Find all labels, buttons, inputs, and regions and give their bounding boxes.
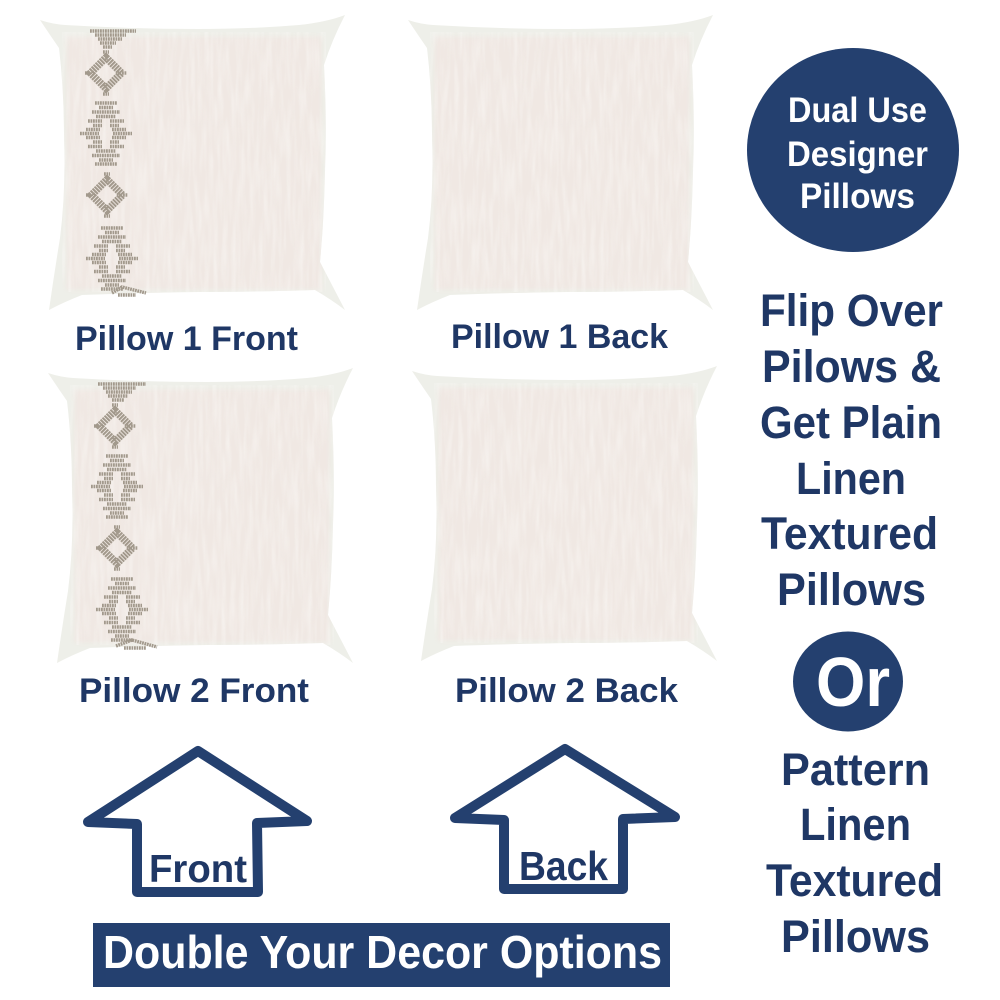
badge: Or: Or	[816, 643, 890, 721]
text block: flip over: Textured	[761, 508, 938, 559]
text block: pattern: Linen	[800, 799, 911, 850]
arrow: Back	[455, 749, 675, 889]
label: Pillow 2 Front: Pillow 2 Front	[79, 672, 309, 710]
pattern: pillow 2 front motifs	[91, 384, 157, 648]
label: Back: Back	[519, 843, 608, 889]
text block: pattern: Pillows	[781, 911, 930, 962]
banner: Double Your Decor Options: Double Your Decor Options	[103, 926, 662, 978]
text block: pattern: Pattern	[781, 744, 930, 795]
pillow 2 back	[412, 366, 717, 661]
text block: flip over: Pillows	[777, 564, 926, 615]
badge: Dual Use Designer Pillows	[747, 48, 959, 252]
badge: Dual Use Designer Pillows: Designer	[787, 135, 928, 174]
badge: Dual Use Designer Pillows: Dual Use	[788, 91, 927, 130]
text block: flip over: Linen	[796, 453, 906, 504]
text block: pattern	[766, 744, 943, 962]
text block: flip over: Pilows &	[762, 341, 941, 392]
pattern: pillow 1 front motifs	[80, 31, 146, 295]
label: Pillow 2 Back: Pillow 2 Back	[455, 672, 678, 710]
text block: pattern: Textured	[766, 855, 943, 906]
pillow 1 front	[40, 15, 345, 310]
badge: Or	[793, 632, 903, 732]
text block: flip over	[760, 285, 943, 615]
label: Pillow 1 Back: Pillow 1 Back	[451, 318, 668, 356]
text block: flip over: Get Plain	[760, 397, 942, 448]
text block: flip over: Flip Over	[760, 285, 943, 336]
badge: Dual Use Designer Pillows: Pillows	[800, 177, 915, 216]
pillow 2 front	[48, 368, 353, 663]
label: Pillow 1 Front: Pillow 1 Front	[75, 320, 298, 358]
pillow 1 back	[408, 15, 713, 310]
arrow: Front	[88, 751, 307, 892]
label: Front: Front	[149, 848, 247, 891]
